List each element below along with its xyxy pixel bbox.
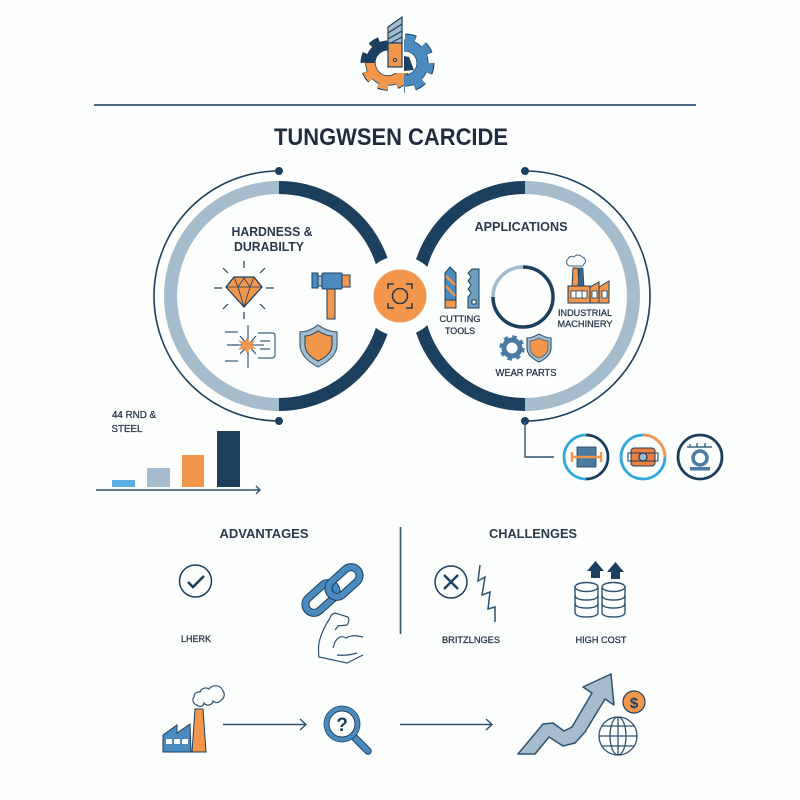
- panel: applications ring: [417, 167, 650, 425]
- label: cutting tools: [440, 314, 480, 337]
- heading: challenges: CHALLENGES: [489, 526, 577, 541]
- connector line: [525, 421, 554, 457]
- icon: check circle: [180, 565, 212, 597]
- label: brittleness: BRITZLNGES: [442, 635, 500, 646]
- icon: saw blade: [468, 269, 479, 308]
- icon: drill bit: [445, 267, 456, 308]
- center progress ring: [493, 267, 553, 327]
- icon: cost arrows: [587, 561, 624, 579]
- icon: wear shield: [527, 334, 551, 362]
- icon: dollar coin: $: [630, 695, 639, 712]
- icon: diamond: [214, 261, 274, 319]
- bar chart: [96, 410, 260, 494]
- heading: hardness and durability: DURABILTY: [234, 240, 305, 254]
- label: industrial machinery: MACHINERY: [558, 319, 613, 330]
- heading: advantages: ADVANTAGES: [220, 526, 309, 541]
- label: cutting tools: TOOLS: [445, 326, 475, 337]
- heading: hardness and durability: [232, 225, 312, 254]
- chart label: 44 RND &: [112, 410, 156, 421]
- icon: machine part badge two: [621, 435, 665, 479]
- icon: machine part badge three: [678, 435, 722, 479]
- label: industrial machinery: [558, 308, 613, 330]
- logo: gears and end mill: [364, 17, 431, 89]
- label: industrial machinery: INDUSTRIAL: [558, 308, 612, 319]
- arrow: factory to inspection: [223, 719, 306, 730]
- panel: hardness and durability ring: [154, 167, 388, 425]
- icon: factory: [567, 255, 609, 303]
- vertical divider: [400, 527, 402, 634]
- title: TUNGWSEN CARCIDE: [274, 124, 508, 151]
- icon: crack: [478, 565, 495, 622]
- icon: dollar coin: [623, 691, 645, 713]
- icon: globe: [599, 717, 637, 755]
- icon: flexed arm: [318, 613, 363, 663]
- icon: impact burst: [225, 325, 275, 368]
- center hub icon: [360, 256, 440, 336]
- heading: hardness and durability: HARDNESS &: [232, 225, 312, 239]
- label: wear parts: WEAR PARTS: [496, 368, 557, 379]
- icon: wear gear: [501, 337, 523, 359]
- icon: shield: [300, 325, 337, 367]
- icon: growth arrow: [518, 674, 614, 754]
- icon: chain links: [302, 564, 363, 616]
- icon: x circle: [435, 566, 467, 598]
- icon: factory with smoke: [163, 686, 224, 752]
- label: high cost: HIGH COST: [576, 635, 627, 646]
- icon: coin stacks: [575, 582, 625, 617]
- label: lherk: LHERK: [181, 634, 212, 645]
- icon: machine part badge one: [564, 435, 608, 479]
- icon: hammer: [312, 273, 350, 319]
- chart label: STEEL: [112, 424, 143, 435]
- chart label: [112, 410, 156, 435]
- icon: magnifier question: ?: [336, 715, 348, 736]
- arrow: inspection to growth: [400, 719, 492, 730]
- icon: magnifier question: [324, 706, 368, 751]
- heading: applications: APPLICATIONS: [474, 220, 568, 234]
- label: cutting tools: CUTTING: [440, 314, 480, 325]
- top divider line: [94, 104, 696, 106]
